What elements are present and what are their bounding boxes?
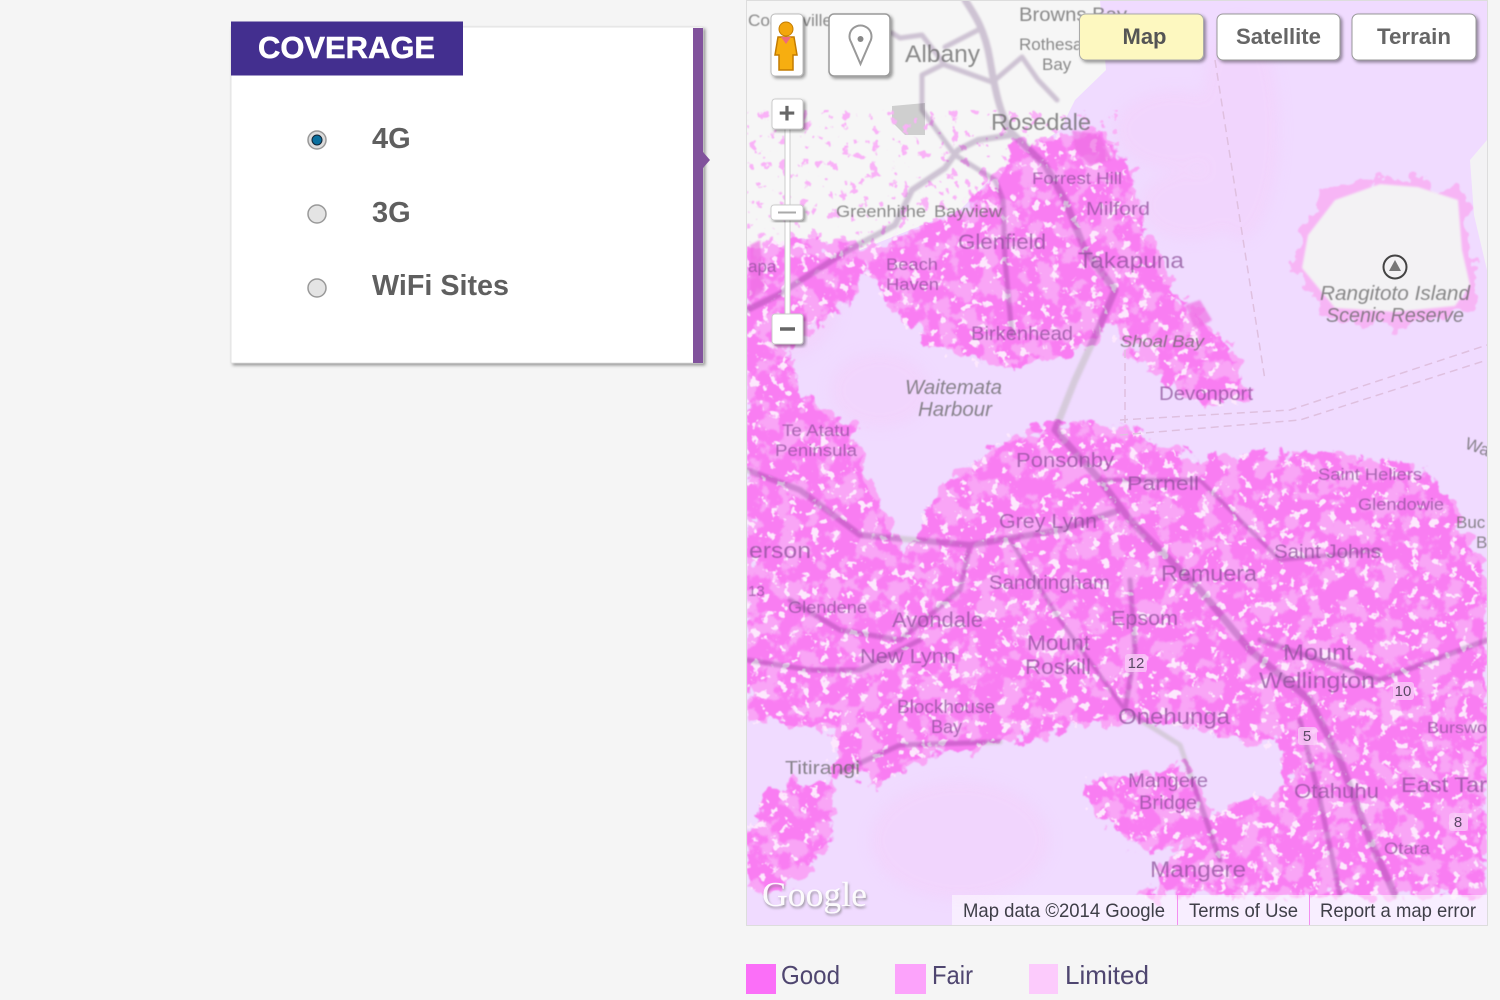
- option: 3G: [308, 197, 411, 229]
- labels: north: Glenfield: [958, 231, 1046, 254]
- option: WiFi Sites: [308, 270, 509, 302]
- labels: north: Birkenhead: [971, 324, 1073, 345]
- labels: north: Beach: [886, 255, 938, 274]
- control: street view pegman: [771, 14, 803, 76]
- labels: central and south: Wa: [1463, 434, 1493, 460]
- labels: central and south: Buc: [1456, 513, 1486, 532]
- logo: Google: Google: [762, 875, 867, 914]
- labels: central and south: Wellington: [1259, 668, 1375, 693]
- labels: north: Haven: [886, 275, 939, 294]
- labels: north: Rangitoto Island: [1320, 283, 1471, 305]
- option: 3G: 3G: [372, 197, 411, 229]
- legend: [746, 960, 1149, 994]
- labels: central and south: Saint Johns: [1274, 542, 1381, 563]
- heading: coverage: [231, 22, 463, 76]
- motorway shields: [1125, 654, 1468, 831]
- map artwork: land and signal coverage: [720, 0, 1493, 925]
- ferry lines: [1120, 60, 1487, 435]
- north land scattered coverage: [747, 110, 1120, 250]
- labels: central and south: [748, 421, 1493, 882]
- labels: central and south: Mangere: [1128, 771, 1208, 792]
- labels: north: Scenic Reserve: [1326, 305, 1464, 327]
- attribution bar: [952, 895, 1487, 925]
- map frame: [746, 0, 1488, 926]
- labels: central and south: Mount: [1283, 640, 1353, 665]
- labels: north: apa: [748, 257, 777, 276]
- attribution bar: Report a map error: [1320, 900, 1476, 922]
- white gaps in coverage: [747, 128, 1487, 895]
- roads: [747, 0, 1487, 895]
- motorway shields: 12: [1128, 655, 1144, 672]
- control: zoom slider: +: [779, 98, 795, 130]
- fair coverage areas: [747, 128, 1487, 895]
- labels: central and south: Remuera: [1161, 561, 1258, 586]
- Rangitoto island: [1296, 140, 1487, 330]
- labels: central and south: Peninsula: [775, 441, 858, 460]
- button: Terrain: Terrain: [1377, 24, 1451, 49]
- labels: central and south: Ponsonby: [1016, 450, 1114, 472]
- labels: north: Browns Bay: [1019, 5, 1128, 26]
- attribution bar: Terms of Use: [1189, 900, 1298, 922]
- labels: central and south: Epsom: [1111, 608, 1178, 630]
- labels: central and south: Saint Heliers: [1318, 465, 1422, 484]
- panel: coverage selector: [231, 22, 710, 363]
- labels: central and south: Mangere: [1150, 857, 1246, 882]
- legend item: Fair: [895, 960, 973, 994]
- labels: central and south: Roskill: [1025, 656, 1091, 679]
- labels: north: Albany: [905, 41, 980, 68]
- labels: central and south: Mount: [1027, 632, 1090, 655]
- labels: central and south: Grey Lynn: [999, 511, 1097, 533]
- option: 4G: 4G: [372, 123, 411, 155]
- map panel: [720, 0, 1493, 926]
- labels: north: Shoal Bay: [1120, 332, 1206, 351]
- labels: central and south: B: [1476, 533, 1487, 552]
- legend item: Limited: [1029, 960, 1149, 994]
- labels: north: Greenhithe: [836, 202, 926, 221]
- labels: central and south: Onehunga: [1118, 704, 1231, 729]
- motorway shields: 10: [1395, 683, 1411, 700]
- labels: north: [748, 5, 1471, 421]
- labels: north: Coatesville: [748, 11, 832, 30]
- labels: north: Harbour: [918, 399, 993, 421]
- sea tint patches: [720, 20, 1280, 900]
- labels: central and south: Te Atatu: [782, 421, 850, 440]
- button: Map: Map: [1122, 24, 1166, 49]
- labels: central and south: Bridge: [1139, 793, 1197, 814]
- labels: central and south: erson: [749, 538, 811, 563]
- darker signal patches: [750, 130, 1212, 330]
- labels: central and south: Parnell: [1127, 474, 1199, 495]
- labels: central and south: Otara: [1384, 839, 1431, 858]
- labels: central and south: Sandringham: [989, 573, 1110, 594]
- labels: central and south: Glendowie: [1358, 495, 1444, 514]
- labels: central and south: Otahuhu: [1294, 781, 1379, 803]
- labels: north: Forrest Hill: [1032, 169, 1122, 188]
- purple side bar with pointer: [693, 28, 710, 363]
- attribution bar: Map data ©2014 Google: [963, 900, 1165, 922]
- control: place pin: [829, 14, 890, 76]
- labels: central and south: Avondale: [892, 609, 983, 632]
- labels: north: Rothesay: [1019, 35, 1091, 54]
- labels: north: Waitemata: [905, 377, 1002, 399]
- good coverage areas: [747, 128, 1487, 895]
- airfield block: [892, 103, 925, 135]
- icon: park marker: [1384, 256, 1406, 278]
- labels: central and south: New Lynn: [860, 646, 956, 668]
- motorway shields: 8: [1454, 814, 1462, 831]
- button: Satellite: [1217, 14, 1340, 60]
- labels: central and south: Blockhouse: [897, 697, 995, 717]
- motorway shields: 5: [1303, 728, 1311, 745]
- labels: central and south: East Tar: [1401, 774, 1487, 797]
- labels: north: Rosedale: [991, 109, 1091, 135]
- labels: north: Devonport: [1159, 384, 1254, 405]
- button: Terrain: [1352, 14, 1476, 60]
- labels: central and south: 13: [748, 583, 765, 600]
- legend item: Good: Good: [781, 960, 840, 990]
- labels: central and south: Burswo: [1427, 720, 1487, 737]
- legend item: Good: [746, 960, 840, 994]
- legend item: Limited: Limited: [1065, 960, 1149, 990]
- labels: north: Milford: [1086, 199, 1150, 219]
- labels: north: Takapuna: [1078, 248, 1185, 273]
- button: Satellite: Satellite: [1236, 24, 1321, 49]
- north land: [747, 0, 1106, 255]
- labels: central and south: Titirangi: [785, 758, 860, 778]
- labels: north: Bayview: [934, 202, 1003, 221]
- button: Map: [1080, 14, 1204, 60]
- labels: central and south: Glendene: [788, 598, 867, 617]
- option: 4G: [308, 123, 411, 155]
- legend item: Fair: Fair: [932, 960, 973, 990]
- control: zoom slider: [771, 98, 803, 344]
- option: WiFi Sites: WiFi Sites: [372, 270, 509, 302]
- panel card: [231, 27, 703, 363]
- heading: coverage: COVERAGE: [258, 30, 435, 65]
- labels: north: Bay: [1042, 55, 1072, 74]
- labels: central and south: Bay: [931, 717, 962, 737]
